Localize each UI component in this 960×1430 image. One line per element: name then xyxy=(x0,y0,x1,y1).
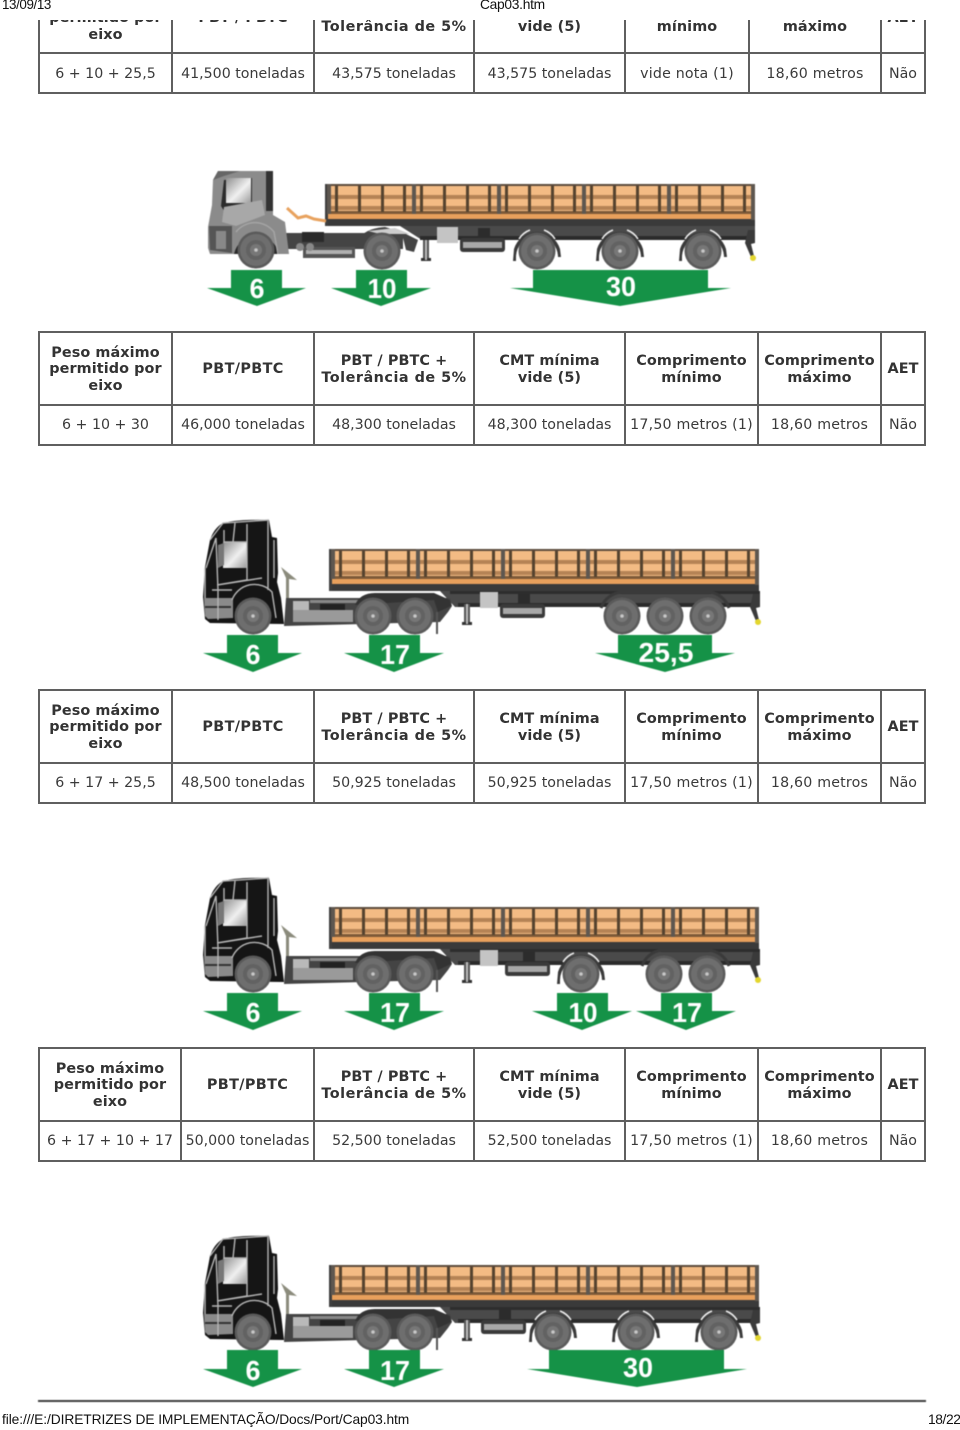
table: 6 + 17 + 10 + 17: Comprimento xyxy=(636,1069,747,1085)
truck 4: black tractor with three spread axles xyxy=(203,1236,761,1350)
arrow: 10 xyxy=(331,270,431,306)
arrow: 17 rear xyxy=(636,993,736,1030)
table: 6 + 10 + 30: 48,300 toneladas xyxy=(488,417,611,433)
table: 6 + 10 + 30: 48,300 toneladas xyxy=(332,417,456,433)
table: 6 + 10 + 30: CMT mínima xyxy=(499,353,600,369)
arrow: 17 xyxy=(344,1350,444,1387)
table: 6 + 17 + 25,5: 18,60 metros xyxy=(771,775,868,791)
table: 6 + 10 + 30: AET xyxy=(887,361,919,377)
arrow: 25,5 xyxy=(595,635,735,672)
table: 6 + 17 + 10 + 17: PBT/PBTC xyxy=(207,1077,288,1093)
table: 6 + 10 + 30: Comprimento xyxy=(764,353,875,369)
table: 6 + 17 + 10 + 17: Peso máximo xyxy=(56,1061,164,1077)
cargo body xyxy=(325,184,755,226)
table: 6 + 17 + 25,5: permitido por xyxy=(49,719,162,735)
truck 3: black tractor with spread-axle trailer xyxy=(203,878,761,992)
arrow: 6: 6 xyxy=(250,273,264,304)
arrow: 30 xyxy=(510,270,731,306)
table: 6 + 17 + 25,5: Comprimento xyxy=(636,711,747,727)
trailer chassis xyxy=(400,226,756,261)
table: 6 + 10 + 30: 18,60 metros xyxy=(771,417,868,433)
table: 6 + 17 + 10 + 17: 52,500 toneladas xyxy=(332,1133,456,1149)
arrow: 10: 10 xyxy=(568,997,598,1028)
table: 6 + 10 + 30: Não xyxy=(889,417,917,433)
table: 6 + 17 + 25,5: mínimo xyxy=(661,728,722,744)
table: 6 + 17 + 10 + 17: 6 + 17 + 10 + 17 xyxy=(47,1133,173,1149)
trailer xyxy=(329,1265,761,1341)
wheels xyxy=(238,230,727,270)
trailer xyxy=(329,549,761,625)
arrow: 30: 30 xyxy=(623,1352,653,1383)
table: 6 + 17 + 10 + 17: vide (5) xyxy=(518,1086,581,1102)
table: 6 + 10 + 30: 17,50 metros (1) xyxy=(630,417,753,433)
table: 6 + 17 + 25,5: eixo xyxy=(88,736,123,752)
table: 6 + 17 + 10 + 17: AET xyxy=(887,1077,919,1093)
arrow: 6 xyxy=(203,635,302,672)
arrow: 6: 6 xyxy=(246,1355,260,1386)
table: 6 + 10 + 25,5 (clipped at top): 43,575 toneladas xyxy=(332,66,456,82)
print footer page number: 18/22 xyxy=(928,1412,960,1427)
table: 6 + 17 + 10 + 17: 52,500 toneladas xyxy=(488,1133,611,1149)
wheels xyxy=(557,950,729,992)
wheels xyxy=(601,592,729,634)
table: 6 + 17 + 25,5: PBT/PBTC xyxy=(202,719,284,735)
arrow: 6: 6 xyxy=(246,997,260,1028)
table: 6 + 10 + 30: mínimo xyxy=(661,370,722,386)
arrow: 25,5: 25,5 xyxy=(638,637,694,668)
table: 6 + 17 + 10 + 17: PBT / PBTC + xyxy=(341,1069,447,1085)
arrow: 30: 30 xyxy=(606,271,636,302)
trailer xyxy=(329,907,761,983)
arrow: 17: 17 xyxy=(380,639,410,670)
table: 6 + 17 + 25,5: máximo xyxy=(787,728,852,744)
table: 6 + 17 + 25,5: PBT / PBTC + xyxy=(341,711,447,727)
bottom rule xyxy=(38,1400,926,1402)
table: 6 + 10 + 30: Comprimento xyxy=(636,353,747,369)
table: 6 + 10 + 30: PBT/PBTC xyxy=(202,361,284,377)
table: 6 + 17 + 25,5: 50,925 toneladas xyxy=(332,775,456,791)
tractor xyxy=(203,1236,452,1350)
table: 6 + 17 + 10 + 17: eixo xyxy=(93,1094,127,1110)
table: 6 + 17 + 25,5: 50,925 toneladas xyxy=(488,775,611,791)
table: 6 + 17 + 25,5: 48,500 toneladas xyxy=(181,775,305,791)
table: 6 + 17 + 25,5: Peso máximo xyxy=(51,703,160,719)
coupling hoses xyxy=(287,208,326,221)
tractor xyxy=(203,520,452,634)
table: 6 + 17 + 25,5: CMT mínima xyxy=(499,711,600,727)
table: 6 + 17 + 25,5: Tolerância de 5% xyxy=(321,728,467,744)
arrow: 17 xyxy=(344,993,444,1030)
grey cab xyxy=(208,171,289,254)
table: 6 + 17 + 10 + 17: Comprimento xyxy=(764,1069,875,1085)
table: 6 + 10 + 30: permitido por xyxy=(49,361,162,377)
truck 1: grey tractor with three-axle trailer xyxy=(208,171,756,270)
table: 6 + 10 + 25,5 (clipped at top): Não xyxy=(889,66,917,82)
table: 6 + 17 + 25,5: AET xyxy=(887,719,919,735)
arrow: 6: 6 xyxy=(246,639,260,670)
table: 6 + 17 + 10 + 17: Tolerância de 5% xyxy=(321,1086,467,1102)
table: 6 + 10 + 30: eixo xyxy=(88,378,123,394)
table: 6 + 10 + 30: vide (5) xyxy=(518,370,581,386)
table: 6 + 10 + 30 xyxy=(38,331,926,446)
tractor frame xyxy=(285,227,418,258)
arrow: 17 xyxy=(344,635,444,672)
arrow: 6 xyxy=(203,1350,302,1387)
table: 6 + 17 + 10 + 17: CMT mínima xyxy=(499,1069,600,1085)
print footer file path: file:///E:/DIRETRIZES DE IMPLEMENTAÇÃO/Docs/Port/Cap03.htm xyxy=(2,1412,409,1427)
arrow: 6 xyxy=(207,270,306,306)
truck 2: black tractor with tri-axle trailer xyxy=(203,520,761,634)
table: 6 + 17 + 25,5 xyxy=(38,689,926,804)
table: 6 + 10 + 25,5 (clipped at top): eixo xyxy=(88,27,123,43)
table: 6 + 10 + 25,5 (clipped at top): 18,60 metros xyxy=(766,66,864,82)
tractor xyxy=(203,878,452,992)
table: 6 + 17 + 25,5: vide (5) xyxy=(518,728,581,744)
table: 6 + 10 + 30: 6 + 10 + 30 xyxy=(62,417,149,433)
table: 6 + 10 + 25,5 (clipped at top) xyxy=(38,20,926,94)
table: 6 + 17 + 10 + 17: Não xyxy=(889,1133,917,1149)
table: 6 + 17 + 25,5: Comprimento xyxy=(764,711,875,727)
arrow: 17 rear: 17 xyxy=(672,997,702,1028)
table: 6 + 17 + 10 + 17: permitido por xyxy=(54,1077,166,1093)
table: 6 + 17 + 25,5: Não xyxy=(889,775,917,791)
table: 6 + 10 + 30: máximo xyxy=(787,370,852,386)
table: 6 + 10 + 30: PBT / PBTC + xyxy=(341,353,447,369)
table: 6 + 10 + 25,5 (clipped at top): vide nota (1) xyxy=(640,66,734,82)
arrow: 10 xyxy=(532,993,632,1030)
table: 6 + 10 + 25,5 (clipped at top): 6 + 10 + 25,5 xyxy=(55,66,156,82)
table: 6 + 10 + 25,5 (clipped at top): 43,575 toneladas xyxy=(488,66,611,82)
arrow: 30 xyxy=(527,1350,747,1387)
arrow: 6 xyxy=(203,993,302,1030)
table: 6 + 17 + 10 + 17 xyxy=(38,1047,926,1162)
table: 6 + 10 + 30: 46,000 toneladas xyxy=(181,417,305,433)
table: 6 + 17 + 10 + 17: 17,50 metros (1) xyxy=(630,1133,753,1149)
table: 6 + 10 + 25,5 (clipped at top): 41,500 toneladas xyxy=(181,66,305,82)
table: 6 + 10 + 30: Tolerância de 5% xyxy=(321,370,467,386)
table: 6 + 10 + 30: Peso máximo xyxy=(51,345,160,361)
table: 6 + 17 + 25,5: 17,50 metros (1) xyxy=(630,775,753,791)
wheels xyxy=(529,1311,743,1350)
table: 6 + 17 + 10 + 17: máximo xyxy=(787,1086,852,1102)
arrow: 10: 10 xyxy=(368,273,396,304)
table: 6 + 17 + 25,5: 6 + 17 + 25,5 xyxy=(55,775,156,791)
table: 6 + 17 + 10 + 17: 18,60 metros xyxy=(771,1133,868,1149)
table: 6 + 17 + 10 + 17: 50,000 toneladas xyxy=(186,1133,309,1149)
table: 6 + 17 + 10 + 17: mínimo xyxy=(661,1086,722,1102)
arrow: 17: 17 xyxy=(380,1355,410,1386)
arrow: 17: 17 xyxy=(380,997,410,1028)
